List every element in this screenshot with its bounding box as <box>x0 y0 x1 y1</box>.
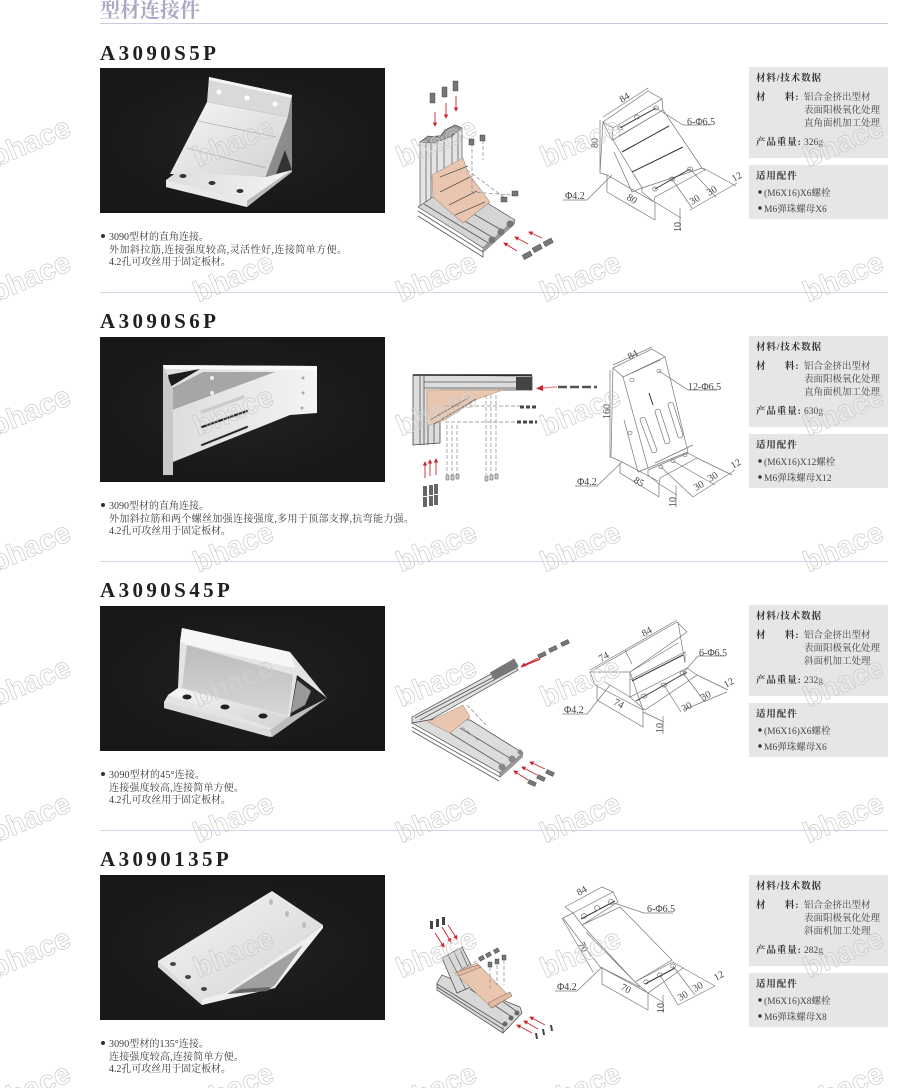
watermark: bhace pattern: bhace <box>536 381 625 443</box>
dimension drawing: 30 <box>706 470 720 485</box>
watermark: bhace pattern: bhace <box>189 788 278 850</box>
panel: fittings: 适用配件 <box>756 170 798 182</box>
panel: material spec: 产品重量: <box>756 136 802 148</box>
description text: 外加斜拉筋,连接强度较高,灵活性好,连接简单方便。 <box>109 243 347 256</box>
watermark: bhace pattern: bhace <box>536 517 625 579</box>
dimension drawing <box>562 620 736 734</box>
description text: 4.2孔可攻丝用于固定板材。 <box>109 793 231 806</box>
description text <box>101 1037 244 1075</box>
watermark: bhace pattern: bhace <box>189 381 278 443</box>
dimension drawing: 30 <box>680 700 694 715</box>
panel: material spec: 料: <box>785 91 799 103</box>
panel: material spec: 材料/技术数据 <box>756 341 822 353</box>
dimension drawing: 74 <box>612 697 626 711</box>
dimension drawing: 12-Φ6.5 <box>688 382 721 393</box>
dimension drawing: 12 <box>722 676 736 691</box>
panel: material spec: 铝合金挤出型材 <box>804 629 871 641</box>
watermark: bhace pattern: bhace <box>392 381 481 443</box>
watermark: bhace pattern: bhace <box>536 112 625 174</box>
panel: material spec: 材 <box>756 629 766 641</box>
watermark: bhace pattern: bhace <box>799 652 888 714</box>
dimension drawing: 160 <box>602 404 613 419</box>
panel: fittings: M6弹珠螺母X12 <box>764 472 832 484</box>
dimension drawing: 85 <box>632 475 646 490</box>
watermark: bhace pattern: bhace <box>536 247 625 309</box>
panel: material spec: 料: <box>785 360 799 372</box>
heading: A3090S45P: A3090S45P <box>100 578 233 602</box>
dimension drawing: Φ4.2 <box>557 982 577 993</box>
watermark: bhace pattern: bhace <box>536 652 625 714</box>
panel: fittings: (M6X16)X8螺栓 <box>764 995 831 1007</box>
panel: material spec <box>749 875 888 966</box>
dimension drawing: 10 <box>655 723 666 733</box>
panel: fittings: 适用配件 <box>756 708 798 720</box>
dimension drawing: Φ4.2 <box>564 705 584 716</box>
panel: material spec: 材 <box>756 360 766 372</box>
dimension drawing: 12 <box>730 170 744 185</box>
description text: 连接强度较高,连接简单方便。 <box>109 781 244 794</box>
panel: fittings <box>749 973 888 1027</box>
watermark: bhace pattern: bhace <box>189 652 278 714</box>
assembly diagram <box>412 639 569 787</box>
panel: fittings: (M6X16)X6螺栓 <box>764 187 831 199</box>
panel: material spec: 铝合金挤出型材 <box>804 91 871 103</box>
assembly diagram <box>430 917 553 1039</box>
dimension drawing: 84 <box>618 91 632 106</box>
panel: material spec <box>749 605 888 696</box>
heading: A3090S5P: A3090S5P <box>100 41 219 65</box>
dimension drawing <box>563 88 744 232</box>
watermark: bhace pattern: bhace <box>799 923 888 985</box>
dimension drawing: 30 <box>676 989 690 1004</box>
panel: fittings <box>749 703 888 757</box>
dimension drawing: 6-Φ6.5 <box>647 904 675 915</box>
watermark: bhace pattern: bhace <box>392 247 481 309</box>
dimension drawing: 12 <box>712 969 726 984</box>
panel: material spec <box>749 336 888 427</box>
dimension drawing: 12 <box>729 457 743 472</box>
panel: fittings: (M6X16)X6螺栓 <box>764 725 831 737</box>
panel: material spec: 斜面机加工处理 <box>804 655 871 667</box>
dimension drawing <box>555 884 726 1013</box>
panel: material spec: 232g <box>804 676 823 686</box>
panel: fittings: M6弹珠螺母X6 <box>764 741 827 753</box>
dimension drawing: 10 <box>668 497 679 507</box>
watermark: bhace pattern: bhace <box>392 517 481 579</box>
panel: material spec: 630g <box>804 407 823 417</box>
watermark: bhace pattern: bhace <box>189 247 278 309</box>
dimension drawing: 30 <box>688 193 702 208</box>
panel: fittings: M6弹珠螺母X6 <box>764 203 827 215</box>
panel: material spec: 326g <box>804 138 823 148</box>
dimension drawing: 84 <box>626 348 640 363</box>
panel: material spec: 产品重量: <box>756 944 802 956</box>
dimension drawing: 80 <box>624 192 639 207</box>
dimension drawing: 70 <box>575 940 590 954</box>
panel: material spec <box>749 67 888 158</box>
panel: material spec: 材 <box>756 91 766 103</box>
panel: fittings: (M6X16)X12螺栓 <box>764 456 836 468</box>
dimension drawing: 6-Φ6.5 <box>687 117 715 128</box>
panel: material spec: 直角面机加工处理 <box>804 117 881 129</box>
panel: material spec: 产品重量: <box>756 674 802 686</box>
photo: A3090S45P bracket <box>100 606 385 751</box>
panel: product A3090135P <box>100 847 888 1075</box>
dimension drawing: 10 <box>673 222 684 232</box>
panel: material spec: 表面阳极氧化处理 <box>804 104 881 116</box>
description text: 3090型材的直角连接。 <box>109 499 209 512</box>
dimension drawing: 6-Φ6.5 <box>699 648 727 659</box>
dimension drawing: 74 <box>597 650 611 665</box>
watermark: bhace pattern: bhace <box>536 923 625 985</box>
photo: A3090S5P bracket <box>100 68 385 213</box>
panel: material spec: 表面阳极氧化处理 <box>804 642 881 654</box>
watermark: bhace pattern: bhace <box>799 788 888 850</box>
dimension drawing <box>575 347 743 507</box>
description text: 4.2孔可攻丝用于固定板材。 <box>109 1062 231 1075</box>
watermark: bhace pattern: bhace <box>392 652 481 714</box>
dimension drawing: 10 <box>656 1003 667 1013</box>
assembly diagram <box>413 375 597 507</box>
watermark: bhace pattern: bhace <box>189 517 278 579</box>
panel: fittings <box>749 165 888 219</box>
panel: material spec: 斜面机加工处理 <box>804 925 871 937</box>
dimension drawing: 80 <box>590 138 601 148</box>
heading: A3090S6P: A3090S6P <box>100 309 219 333</box>
panel: fittings: M6弹珠螺母X8 <box>764 1011 827 1023</box>
watermark: bhace pattern: bhace <box>189 112 278 174</box>
description text <box>101 230 347 268</box>
watermark: bhace pattern: bhace <box>799 517 888 579</box>
panel: material spec: 产品重量: <box>756 405 802 417</box>
panel: fittings <box>749 434 888 488</box>
heading: A3090135P: A3090135P <box>100 847 232 871</box>
panel: material spec: 材 <box>756 899 766 911</box>
dimension drawing: 30 <box>705 184 719 199</box>
description text: 3090型材的135°连接。 <box>109 1037 209 1050</box>
dimension drawing: 30 <box>699 689 713 704</box>
dimension drawing: 30 <box>691 980 705 995</box>
dimension drawing: 84 <box>640 625 654 640</box>
dimension drawing: Φ4.2 <box>577 477 597 488</box>
description text: 连接强度较高,连接简单方便。 <box>109 1050 244 1063</box>
description text <box>101 768 244 806</box>
watermark: bhace pattern: bhace <box>189 923 278 985</box>
panel: material spec: 表面阳极氧化处理 <box>804 912 881 924</box>
panel: material spec: 材料/技术数据 <box>756 72 822 84</box>
panel: fittings: 适用配件 <box>756 439 798 451</box>
watermark: bhace pattern: bhace <box>799 381 888 443</box>
panel: material spec: 材料/技术数据 <box>756 610 822 622</box>
panel: material spec: 材料/技术数据 <box>756 880 822 892</box>
watermark: bhace pattern: bhace <box>392 112 481 174</box>
panel: material spec: 铝合金挤出型材 <box>804 360 871 372</box>
description text: 3090型材的直角连接。 <box>109 230 209 243</box>
panel: product A3090S5P <box>100 41 888 268</box>
dimension drawing: 30 <box>692 479 706 494</box>
watermark: bhace pattern: bhace <box>392 923 481 985</box>
panel: material spec: 直角面机加工处理 <box>804 386 881 398</box>
watermark: bhace pattern: bhace <box>536 788 625 850</box>
panel: material spec: 282g <box>804 946 823 956</box>
panel: fittings: 适用配件 <box>756 978 798 990</box>
photo: A3090S6P bracket <box>100 337 385 482</box>
panel: material spec: 铝合金挤出型材 <box>804 899 871 911</box>
photo: A3090135P bracket <box>100 875 385 1020</box>
dimension drawing: Φ4.2 <box>565 191 585 202</box>
page title: 型材连接件 <box>100 0 200 22</box>
description text: 4.2孔可攻丝用于固定板材。 <box>109 524 231 537</box>
description text <box>101 499 414 537</box>
watermark: bhace pattern: bhace <box>799 247 888 309</box>
dimension drawing: 84 <box>575 884 589 899</box>
panel: material spec: 料: <box>785 629 799 641</box>
panel: material spec: 表面阳极氧化处理 <box>804 373 881 385</box>
panel: material spec: 料: <box>785 899 799 911</box>
description text: 外加斜拉筋和两个螺丝加强连接强度,多用于顶部支撑,抗弯能力强。 <box>109 512 414 525</box>
panel: product A3090S45P <box>100 578 888 806</box>
description text: 3090型材的45°连接。 <box>109 768 205 781</box>
panel: product A3090S6P <box>100 309 888 537</box>
watermark: bhace pattern: bhace <box>392 788 481 850</box>
watermark: bhace pattern: bhace <box>799 112 888 174</box>
description text: 4.2孔可攻丝用于固定板材。 <box>109 255 231 268</box>
assembly diagram <box>418 81 553 260</box>
dimension drawing: 70 <box>619 982 633 996</box>
